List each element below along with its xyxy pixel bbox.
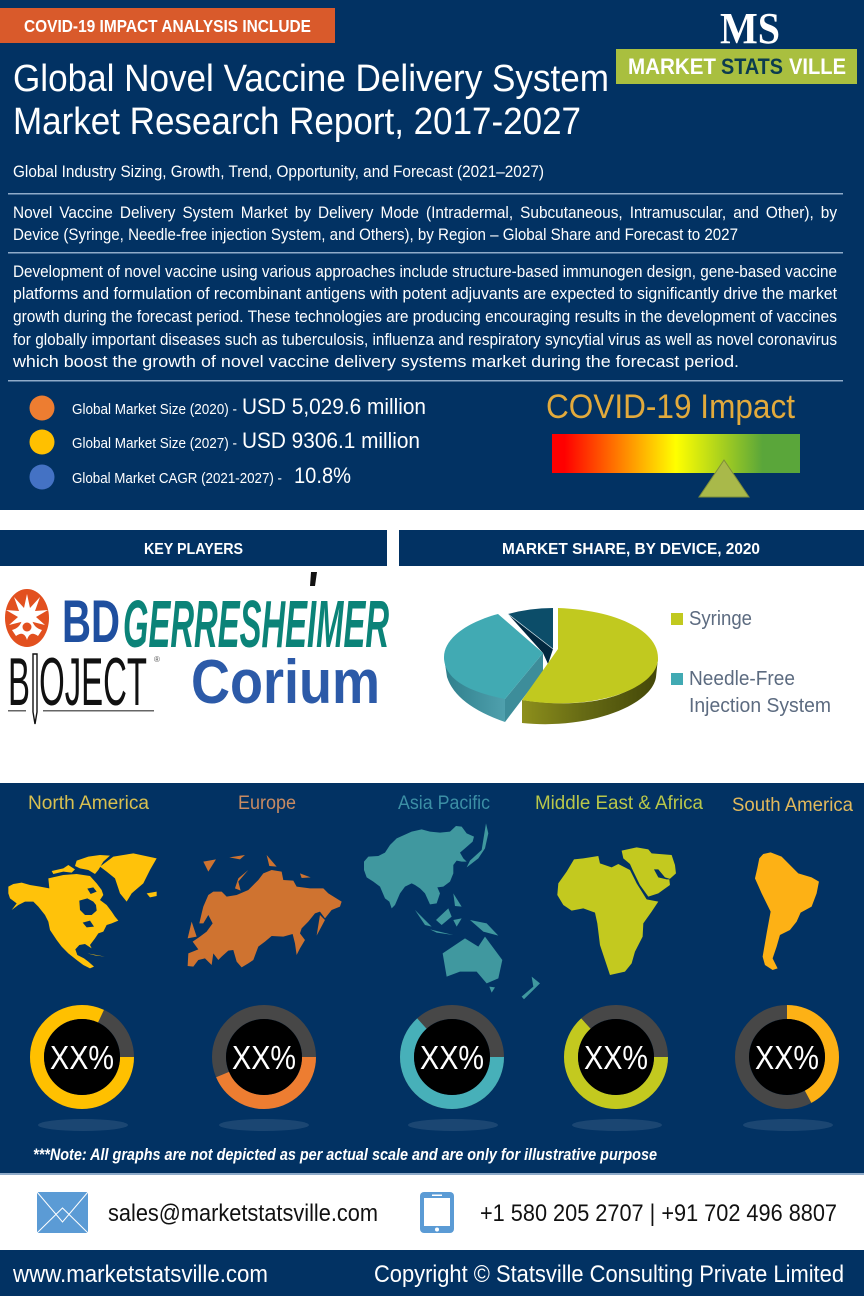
title bbox=[13, 58, 609, 143]
slice: others bbox=[508, 608, 553, 664]
map: europe bbox=[188, 855, 342, 967]
slice: syringe bbox=[522, 608, 658, 724]
stat: market size 2027 bbox=[30, 428, 420, 454]
donut: south america: XX% bbox=[755, 1039, 819, 1076]
logo: bd: BD bbox=[62, 588, 120, 655]
logo: market stats ville: STATS bbox=[721, 54, 783, 79]
logo: market stats ville bbox=[616, 4, 857, 84]
description text bbox=[12, 263, 837, 371]
stat: market cagr: Global Market CAGR (2021-2027) - bbox=[72, 470, 282, 487]
slice: needle-free injection system bbox=[444, 614, 543, 722]
region label: south america: South America bbox=[732, 795, 853, 816]
donut: asia pacific bbox=[407, 1012, 498, 1131]
segmentation text: Device (Syringe, Needle-free injection System, and Others), by Region – Global Share and Forecast to 2027 bbox=[13, 226, 738, 244]
covid-19 impact gauge bbox=[546, 388, 800, 497]
stat: market cagr: 10.8% bbox=[294, 463, 351, 488]
title: Market Research Report, 2017-2027 bbox=[13, 101, 581, 143]
icon: phone bbox=[420, 1192, 454, 1233]
region label: north america: North America bbox=[28, 793, 149, 814]
donut: north america: XX% bbox=[50, 1039, 114, 1076]
region label: europe: Europe bbox=[238, 793, 296, 814]
donut: asia pacific: XX% bbox=[420, 1039, 484, 1076]
pie chart: market share by device bbox=[444, 608, 658, 724]
logo: bioject: ® bbox=[154, 655, 160, 664]
logo: market stats ville: MS bbox=[720, 4, 780, 53]
text: GERRESHEIMER bbox=[123, 587, 389, 662]
stat: market size 2027: USD 9306.1 million bbox=[242, 428, 420, 453]
heading: key players: KEY PLAYERS bbox=[144, 541, 243, 558]
title: Global Novel Vaccine Delivery System bbox=[13, 58, 609, 100]
segmentation text bbox=[13, 204, 838, 244]
heading: key players bbox=[0, 530, 387, 566]
contact: email bbox=[37, 1192, 378, 1233]
pie legend: Syringe bbox=[689, 608, 752, 630]
map: asia pacific bbox=[364, 823, 540, 999]
stat: market cagr bbox=[30, 463, 351, 490]
region label: asia pacific: Asia Pacific bbox=[398, 793, 490, 814]
icon: envelope bbox=[37, 1192, 88, 1233]
pie legend bbox=[671, 608, 831, 717]
stat: market size 2020 bbox=[30, 394, 426, 420]
pie legend: Injection System bbox=[689, 695, 831, 717]
logo: corium: Corium bbox=[191, 648, 380, 717]
stat: market size 2027: Global Market Size (2027) - bbox=[72, 435, 237, 452]
panel: key player logos bbox=[5, 572, 389, 724]
donut: middle east and africa: XX% bbox=[584, 1039, 648, 1076]
description text: platforms and formulation of recombinant antigens with potent adjuvants are expected to significantly drive the market bbox=[13, 285, 837, 303]
logo: market stats ville: VILLE bbox=[789, 54, 846, 79]
footer bar: www.marketstatsville.com bbox=[12, 1261, 268, 1288]
donut: europe bbox=[219, 1012, 309, 1131]
heading: market share bbox=[399, 530, 864, 566]
panel: regions bbox=[0, 783, 864, 1173]
subtitle: Global Industry Sizing, Growth, Trend, Opportunity, and Forecast (2021–2027) bbox=[13, 162, 544, 181]
donut: europe: XX% bbox=[232, 1039, 296, 1076]
contact: email: sales@marketstatsville.com bbox=[108, 1200, 378, 1227]
tag: covid-19 impact: COVID-19 IMPACT ANALYSIS INCLUDE bbox=[24, 16, 311, 36]
tag: covid-19 impact bbox=[0, 8, 335, 43]
region label: middle east and africa: Middle East & Africa bbox=[535, 793, 703, 814]
logo: bioject: BIOJECT bbox=[8, 644, 147, 720]
map: south america bbox=[755, 852, 819, 970]
heading: market share: MARKET SHARE, BY DEVICE, 2020 bbox=[502, 541, 760, 558]
description text: which boost the growth of novel vaccine delivery systems market during the forecast period. bbox=[12, 352, 739, 371]
donut: south america bbox=[742, 1012, 833, 1131]
note: ***Note: All graphs are not depicted as per actual scale and are only for illustrative purpose bbox=[33, 1145, 657, 1164]
footer bar bbox=[0, 1250, 864, 1296]
donut: north america bbox=[37, 1012, 128, 1131]
panel: header bbox=[0, 0, 864, 510]
logo: bioject bbox=[8, 644, 160, 724]
stat: market size 2020: USD 5,029.6 million bbox=[242, 394, 426, 419]
pie legend: Needle-Free bbox=[689, 668, 795, 690]
donut: middle east and africa bbox=[571, 1012, 662, 1131]
covid-19 impact gauge: COVID-19 Impact bbox=[546, 388, 796, 426]
logo: bd bbox=[5, 588, 120, 655]
map: north america bbox=[8, 853, 157, 968]
logo: gerresheimer bbox=[123, 572, 389, 662]
logo: market stats ville: MARKET bbox=[628, 54, 717, 79]
contact: phone bbox=[420, 1192, 837, 1233]
map: middle east and africa bbox=[557, 847, 676, 975]
stat: market size 2020: Global Market Size (2020) - bbox=[72, 401, 237, 418]
